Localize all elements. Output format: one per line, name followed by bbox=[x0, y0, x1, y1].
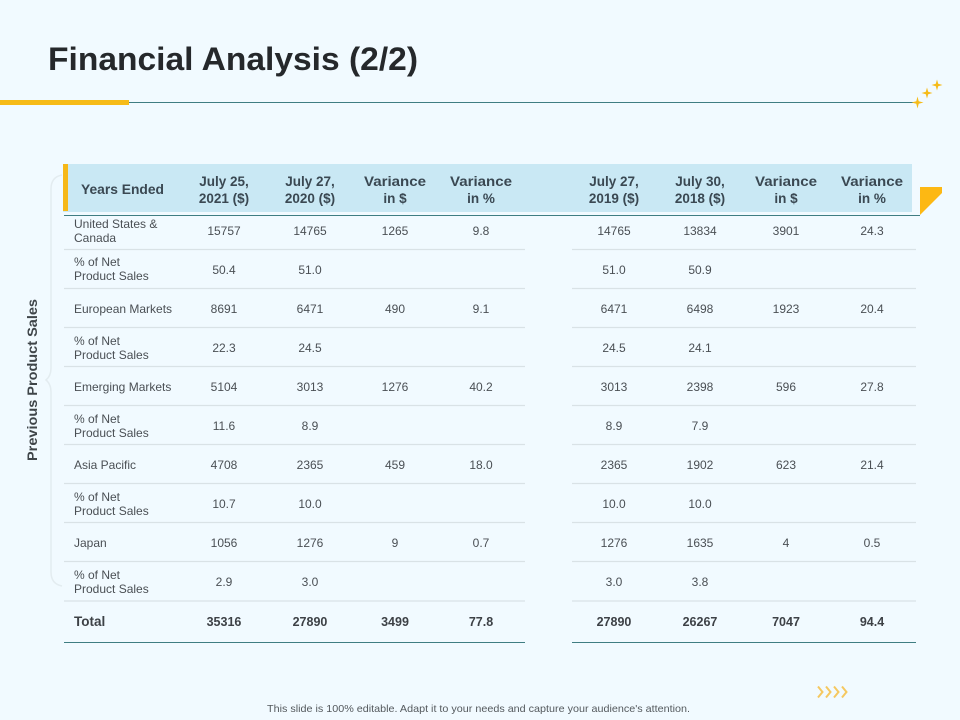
row: Japan: 0.7 bbox=[473, 536, 490, 550]
row: % of net sales 5: 2.9 bbox=[216, 575, 233, 589]
row: European Markets: 8691 bbox=[211, 302, 238, 316]
row: % of net sales 1: 50.4 bbox=[212, 263, 236, 277]
table header band: in $ bbox=[383, 191, 407, 206]
row: % of net sales 4: Product Sales bbox=[74, 504, 149, 518]
row: % of net sales 3 bbox=[74, 412, 709, 440]
row: Asia Pacific: Asia Pacific bbox=[74, 458, 136, 472]
table header band: Variance bbox=[450, 174, 513, 189]
row: Emerging Markets: 596 bbox=[776, 380, 796, 394]
row: % of net sales 1: 51.0 bbox=[298, 263, 322, 277]
table header band: Variance bbox=[755, 174, 818, 189]
row: Asia Pacific: 18.0 bbox=[469, 458, 493, 472]
row: % of net sales 1 bbox=[74, 255, 712, 283]
table header band: 2020 ($) bbox=[285, 191, 335, 206]
side bracket bbox=[46, 175, 62, 586]
row: % of net sales 5: Product Sales bbox=[74, 582, 149, 596]
row: % of net sales 3: 7.9 bbox=[692, 419, 709, 433]
row: Emerging Markets bbox=[74, 380, 884, 394]
row: Emerging Markets: 3013 bbox=[601, 380, 628, 394]
row: % of net sales 4: % of Net bbox=[74, 490, 121, 504]
row dividers bbox=[64, 250, 916, 601]
table header band: in % bbox=[467, 191, 495, 206]
row: Japan: 0.5 bbox=[864, 536, 881, 550]
row: Japan bbox=[74, 536, 881, 550]
row: Total: Total bbox=[74, 614, 105, 629]
footer note: This slide is 100% editable. Adapt it to your needs and capture your audience's attention. bbox=[267, 703, 690, 715]
row: % of net sales 5: % of Net bbox=[74, 568, 121, 582]
row: Total: 35316 bbox=[207, 615, 241, 629]
header rule bbox=[64, 215, 920, 216]
header fold accent bbox=[920, 187, 942, 215]
icon: chevrons bbox=[818, 686, 846, 698]
row: European Markets bbox=[74, 302, 884, 316]
row: % of net sales 4 bbox=[74, 490, 712, 518]
row: Total: 26267 bbox=[683, 615, 717, 629]
row: % of net sales 1: 51.0 bbox=[602, 263, 626, 277]
row: United States & Canada: United States & bbox=[74, 217, 157, 231]
table header band: Variance bbox=[364, 174, 427, 189]
row: Emerging Markets: 27.8 bbox=[860, 380, 884, 394]
row: Total: 27890 bbox=[597, 615, 631, 629]
row: European Markets: 6471 bbox=[297, 302, 324, 316]
table header band: 2021 ($) bbox=[199, 191, 249, 206]
row: Asia Pacific bbox=[74, 458, 884, 472]
row: % of net sales 3: Product Sales bbox=[74, 426, 149, 440]
table header band: in % bbox=[858, 191, 886, 206]
row: United States & Canada: 3901 bbox=[773, 224, 800, 238]
row: United States & Canada bbox=[74, 217, 884, 245]
title rule bbox=[0, 100, 915, 105]
row: % of net sales 4: 10.0 bbox=[688, 497, 712, 511]
table header band: Variance bbox=[841, 174, 904, 189]
table header band: 2018 ($) bbox=[675, 191, 725, 206]
row: % of net sales 5: 3.0 bbox=[302, 575, 319, 589]
row: % of net sales 2: % of Net bbox=[74, 334, 121, 348]
row: European Markets: 490 bbox=[385, 302, 405, 316]
row: Total: 3499 bbox=[381, 615, 409, 629]
row: Japan: 9 bbox=[392, 536, 399, 550]
row: Asia Pacific: 21.4 bbox=[860, 458, 884, 472]
row: Emerging Markets: 5104 bbox=[211, 380, 238, 394]
row: % of net sales 4: 10.0 bbox=[298, 497, 322, 511]
row: % of net sales 2: 24.5 bbox=[298, 341, 322, 355]
row: Asia Pacific: 459 bbox=[385, 458, 405, 472]
row: Japan: 1056 bbox=[211, 536, 238, 550]
table header band bbox=[63, 164, 912, 212]
row: % of net sales 5: 3.8 bbox=[692, 575, 709, 589]
row: Japan: 1276 bbox=[601, 536, 628, 550]
row: Emerging Markets: 1276 bbox=[382, 380, 409, 394]
row: Japan: 4 bbox=[783, 536, 790, 550]
row: United States & Canada: 13834 bbox=[683, 224, 717, 238]
row: % of net sales 2: 22.3 bbox=[212, 341, 236, 355]
row: Total: 77.8 bbox=[469, 615, 493, 629]
row: Asia Pacific: 2365 bbox=[601, 458, 628, 472]
row: % of net sales 1: Product Sales bbox=[74, 269, 149, 283]
row: % of net sales 3: 8.9 bbox=[302, 419, 319, 433]
row: % of net sales 3: % of Net bbox=[74, 412, 121, 426]
row: Total bbox=[74, 614, 884, 629]
row: % of net sales 3: 11.6 bbox=[213, 419, 236, 433]
row: Asia Pacific: 623 bbox=[776, 458, 796, 472]
row: Japan: 1276 bbox=[297, 536, 324, 550]
row: Emerging Markets: 2398 bbox=[687, 380, 714, 394]
side label: Previous Product Sales: Previous Product Sales bbox=[24, 299, 40, 461]
row: Emerging Markets: 40.2 bbox=[469, 380, 493, 394]
row: United States & Canada: 24.3 bbox=[860, 224, 884, 238]
table header band: July 27, bbox=[285, 174, 335, 189]
row: % of net sales 1: % of Net bbox=[74, 255, 121, 269]
row: United States & Canada: 14765 bbox=[597, 224, 631, 238]
table header band: Years Ended bbox=[81, 182, 164, 197]
row: % of net sales 5 bbox=[74, 568, 709, 596]
row: % of net sales 2: Product Sales bbox=[74, 348, 149, 362]
row: United States & Canada: 1265 bbox=[382, 224, 409, 238]
row: United States & Canada: 9.8 bbox=[473, 224, 490, 238]
row: Total: 7047 bbox=[772, 615, 800, 629]
row: European Markets: 6471 bbox=[601, 302, 628, 316]
icon: sparkles bbox=[912, 80, 942, 108]
row: Japan: 1635 bbox=[687, 536, 714, 550]
row: Asia Pacific: 4708 bbox=[211, 458, 238, 472]
table header band: July 25, bbox=[199, 174, 249, 189]
row: European Markets: European Markets bbox=[74, 302, 172, 316]
row: % of net sales 2 bbox=[74, 334, 712, 362]
table bottom rules bbox=[64, 642, 916, 643]
row: European Markets: 6498 bbox=[687, 302, 714, 316]
row: European Markets: 9.1 bbox=[473, 302, 490, 316]
row: Asia Pacific: 1902 bbox=[687, 458, 714, 472]
table header band: July 27, bbox=[589, 174, 639, 189]
title: Financial Analysis (2/2) bbox=[48, 41, 418, 77]
row: Total: 94.4 bbox=[860, 615, 884, 629]
row: % of net sales 4: 10.7 bbox=[212, 497, 236, 511]
row: % of net sales 4: 10.0 bbox=[602, 497, 626, 511]
row: % of net sales 5: 3.0 bbox=[606, 575, 623, 589]
row: % of net sales 1: 50.9 bbox=[688, 263, 712, 277]
row: United States & Canada: Canada bbox=[74, 231, 116, 245]
row: % of net sales 2: 24.5 bbox=[602, 341, 626, 355]
table header band: 2019 ($) bbox=[589, 191, 639, 206]
row: Japan: Japan bbox=[74, 536, 107, 550]
row: Asia Pacific: 2365 bbox=[297, 458, 324, 472]
row: United States & Canada: 14765 bbox=[293, 224, 327, 238]
row: Emerging Markets: Emerging Markets bbox=[74, 380, 171, 394]
row: European Markets: 20.4 bbox=[860, 302, 884, 316]
row: % of net sales 3: 8.9 bbox=[606, 419, 623, 433]
row: % of net sales 2: 24.1 bbox=[688, 341, 712, 355]
row: Emerging Markets: 3013 bbox=[297, 380, 324, 394]
row: Total: 27890 bbox=[293, 615, 327, 629]
row: United States & Canada: 15757 bbox=[207, 224, 241, 238]
row: European Markets: 1923 bbox=[773, 302, 800, 316]
table header band: in $ bbox=[774, 191, 798, 206]
table header band: July 30, bbox=[675, 174, 725, 189]
